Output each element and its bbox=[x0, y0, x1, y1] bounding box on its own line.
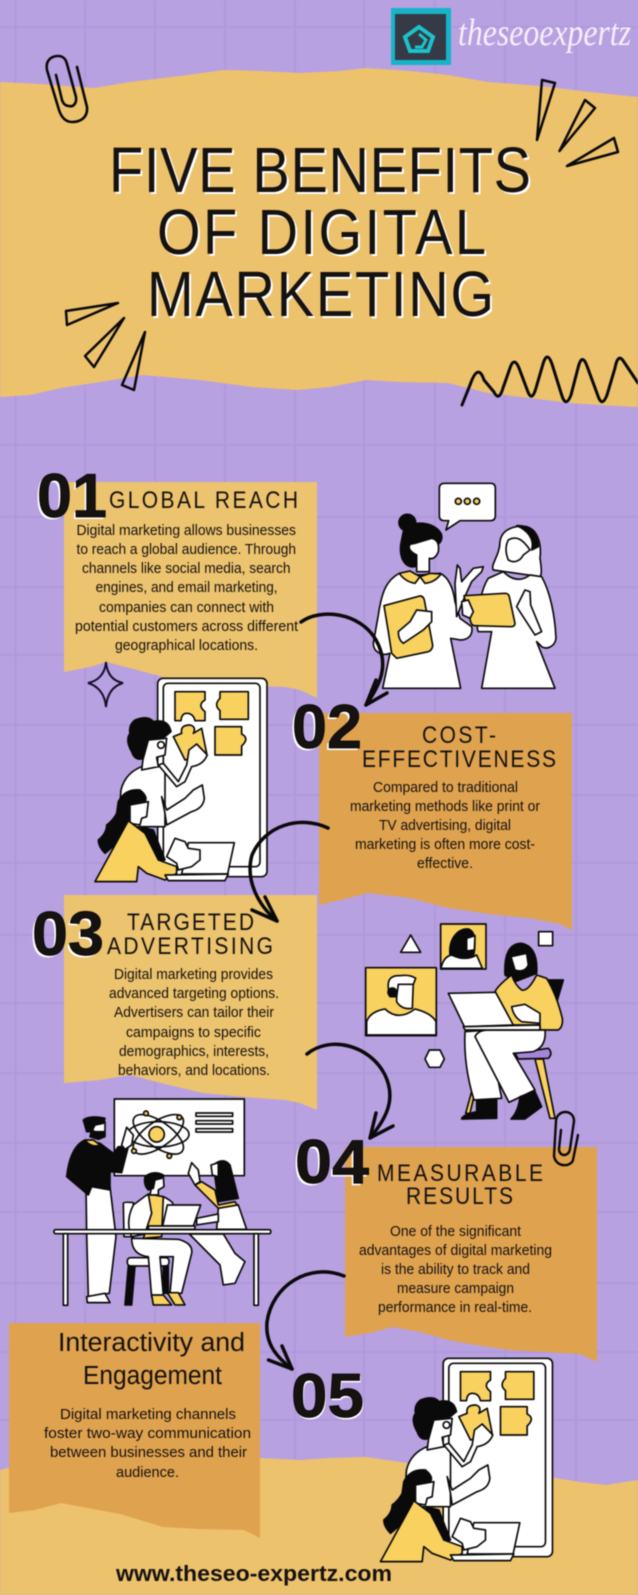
panel: measurable results bbox=[345, 1147, 597, 1362]
heading: targeted advertising bbox=[107, 909, 273, 959]
text: cost-effectiveness body: marketing methods like print or bbox=[350, 799, 540, 815]
text: targeted advertising body: advanced targeting options. bbox=[109, 986, 279, 1002]
text: global reach body: geographical locations. bbox=[115, 638, 258, 654]
text: interactivity body: between businesses and their bbox=[50, 1445, 247, 1461]
title: OF DIGITAL bbox=[159, 199, 488, 270]
heading: global reach: GLOBAL REACH bbox=[109, 487, 298, 513]
arrow: step 2 to step 3 bbox=[250, 822, 328, 921]
title: FIVE BENEFITS bbox=[109, 135, 531, 206]
logo bbox=[391, 8, 631, 65]
number 02: 02 bbox=[292, 693, 362, 762]
number 04: 04 bbox=[293, 1130, 368, 1199]
icon: zigzag scribble bbox=[462, 357, 638, 405]
number 05: 05 bbox=[292, 1364, 365, 1433]
text: global reach body: potential customers across different bbox=[75, 619, 298, 635]
footer website url: www.theseo-expertz.com bbox=[115, 1561, 392, 1586]
number 03: 03 bbox=[32, 900, 104, 969]
text: measurable results body bbox=[359, 1224, 552, 1316]
title: MARKETING bbox=[149, 261, 496, 332]
text: targeted advertising body: campaigns to specific bbox=[126, 1025, 261, 1041]
number 03: 03 bbox=[30, 902, 102, 971]
number 01: 01 bbox=[37, 462, 107, 531]
illustration: woman on laptop with video calls bbox=[366, 924, 563, 1119]
panel: global reach bbox=[64, 482, 317, 698]
text: cost-effectiveness body bbox=[350, 780, 540, 872]
text: cost-effectiveness body: marketing is often more cost- bbox=[355, 837, 535, 853]
heading: targeted advertising: ADVERTISING bbox=[107, 933, 273, 959]
text: global reach body: channels like social media, search bbox=[82, 561, 290, 577]
heading: measurable results: MEASURABLE bbox=[377, 1160, 543, 1186]
title: MARKETING bbox=[147, 259, 494, 330]
text: global reach body: Digital marketing allows businesses bbox=[76, 523, 296, 539]
panel: cost-effectiveness bbox=[319, 713, 572, 930]
panel: interactivity and engagement bbox=[9, 1323, 260, 1538]
heading: interactivity and engagement: Engagement bbox=[83, 1361, 222, 1390]
heading: cost-effectiveness: COST- bbox=[422, 722, 496, 748]
illustration: puzzle board team, bottom bbox=[380, 1358, 552, 1562]
text: global reach body bbox=[75, 523, 298, 654]
arrow: step 4 to step 5 bbox=[267, 1272, 344, 1369]
heading: interactivity and engagement bbox=[58, 1328, 245, 1390]
icon: spark lines bottom left bbox=[66, 303, 145, 390]
text: cost-effectiveness body: effective. bbox=[417, 856, 473, 872]
text: interactivity body: audience. bbox=[116, 1465, 179, 1481]
arrow: step 1 to step 2 bbox=[301, 614, 387, 705]
text: targeted advertising body: Advertisers can tailor their bbox=[114, 1005, 274, 1021]
text: measurable results body: performance in real-time. bbox=[378, 1300, 532, 1316]
title bbox=[109, 135, 533, 332]
text: global reach body: to reach a global audience. Through bbox=[76, 542, 296, 558]
number 05: 05 bbox=[291, 1362, 364, 1431]
icon: sparkle star bbox=[88, 662, 123, 707]
number 01: 01 bbox=[35, 464, 105, 533]
text: global reach body: companies can connect with bbox=[99, 600, 274, 616]
text: targeted advertising body: behaviors, and locations. bbox=[118, 1063, 270, 1079]
illustration: two women talking bbox=[373, 483, 556, 688]
text: interactivity body: foster two-way communication bbox=[44, 1426, 251, 1442]
text: cost-effectiveness body: Compared to traditional bbox=[373, 780, 518, 796]
illustration: puzzle board team bbox=[95, 678, 267, 882]
arrow: step 3 to step 4 bbox=[307, 1044, 393, 1138]
text: measurable results body: measure campaign bbox=[397, 1281, 514, 1297]
title: FIVE BENEFITS bbox=[111, 137, 533, 208]
heading: interactivity and engagement: Interactivity and bbox=[58, 1328, 245, 1357]
text: cost-effectiveness body: TV advertising, digital bbox=[379, 818, 511, 834]
number 02: 02 bbox=[290, 695, 360, 764]
heading: measurable results: RESULTS bbox=[406, 1183, 513, 1209]
heading: targeted advertising: TARGETED bbox=[127, 909, 254, 935]
heading: cost-effectiveness bbox=[362, 722, 556, 772]
title: OF DIGITAL bbox=[157, 197, 486, 268]
text: targeted advertising body: Digital marketing provides bbox=[114, 967, 273, 983]
top torn paper band bbox=[0, 68, 638, 407]
heading: cost-effectiveness: EFFECTIVENESS bbox=[362, 746, 556, 772]
heading: measurable results bbox=[377, 1160, 543, 1209]
icon: paperclip on panel 4 bbox=[554, 1112, 578, 1165]
text: measurable results body: advantages of digital marketing bbox=[359, 1243, 552, 1259]
text: targeted advertising body: demographics, interests, bbox=[119, 1044, 269, 1060]
bottom torn paper band bbox=[0, 1457, 638, 1595]
text: measurable results body: One of the significant bbox=[390, 1224, 521, 1240]
number 04: 04 bbox=[295, 1128, 370, 1197]
panel: targeted advertising bbox=[64, 895, 317, 1110]
icon: paperclip top left bbox=[47, 56, 87, 122]
text: global reach body: engines, and email marketing, bbox=[96, 580, 278, 596]
icon: spark lines top right bbox=[537, 80, 618, 166]
text: targeted advertising body bbox=[109, 967, 279, 1079]
text: measurable results body: is the ability to track and bbox=[381, 1262, 530, 1278]
text: interactivity body bbox=[44, 1407, 251, 1481]
text: interactivity body: Digital marketing channels bbox=[60, 1407, 236, 1423]
illustration: team at desk with whiteboard bbox=[54, 1099, 271, 1305]
